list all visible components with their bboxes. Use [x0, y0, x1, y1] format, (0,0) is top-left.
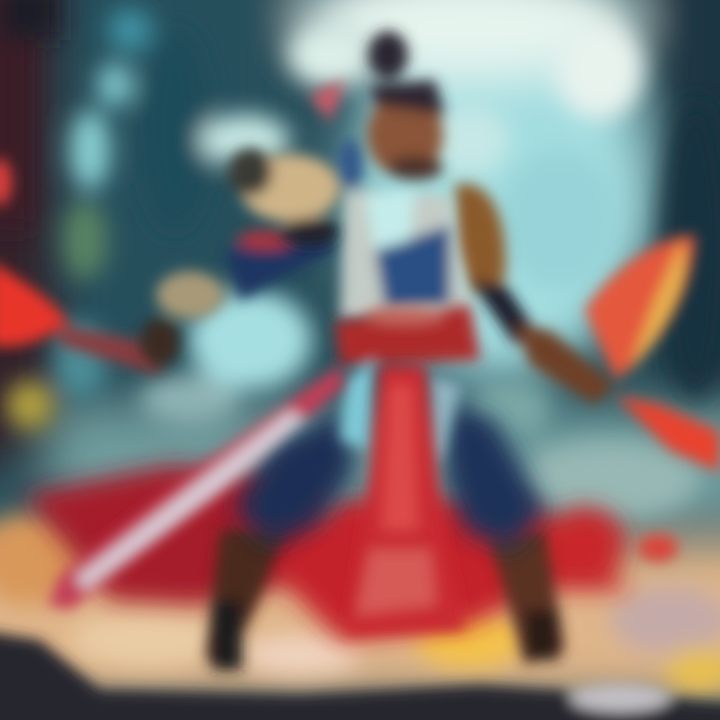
right red fan	[585, 235, 695, 380]
red sash and belt	[335, 305, 480, 465]
navy trousers	[235, 400, 545, 550]
head and hair	[310, 31, 445, 180]
left arm and hand	[140, 228, 335, 366]
warrior figure	[48, 31, 615, 670]
foreground: dark rocks	[0, 630, 720, 720]
legs and boots	[205, 530, 565, 670]
red cape	[25, 465, 630, 640]
sword	[48, 365, 345, 610]
right arm	[455, 184, 615, 405]
torso	[338, 139, 470, 320]
left red flame and spear	[0, 158, 160, 375]
red front cloth	[345, 365, 465, 635]
round tan shield	[228, 148, 340, 246]
right spear tip	[615, 395, 720, 562]
